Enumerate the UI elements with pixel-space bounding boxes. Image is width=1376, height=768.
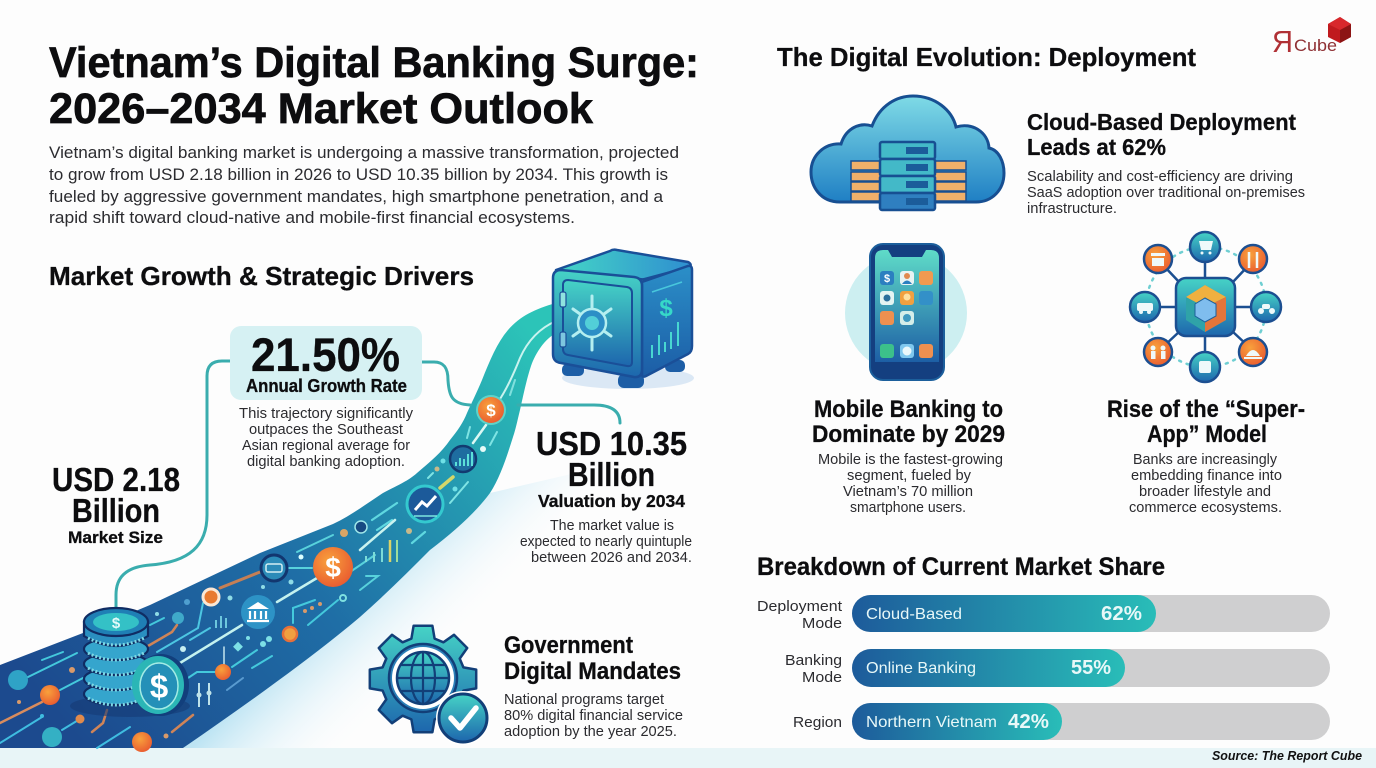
super app text: Rise of the “Super-	[1107, 396, 1305, 423]
stat: valuation: The market value is	[550, 518, 674, 534]
intro paragraph: to grow from USD 2.18 billion in 2026 to USD 10.35 billion by 2034. This growth is	[49, 165, 668, 184]
icon: cloud servers	[811, 96, 1004, 210]
mobile text: Vietnam’s 70 million	[843, 484, 973, 500]
road nodes: $	[486, 401, 496, 420]
bar chart	[757, 595, 1330, 740]
heading: market growth: Market Growth & Strategic Drivers	[49, 261, 474, 291]
super app text: broader lifestyle and	[1139, 484, 1271, 500]
bar: deployment mode: Cloud-Based	[866, 606, 962, 623]
growth rate callout	[230, 326, 422, 400]
icon: government gear	[370, 626, 490, 745]
bar: region: 42%	[1008, 711, 1049, 733]
stat: market size	[52, 461, 180, 547]
stat: market size: Billion	[72, 492, 160, 529]
icon: coin stack	[70, 608, 190, 717]
stat: market size: Market Size	[68, 528, 163, 547]
government mandates text: adoption by the year 2025.	[504, 723, 677, 740]
intro paragraph	[49, 143, 679, 227]
growth rate description	[239, 406, 414, 470]
cloud text: infrastructure.	[1027, 201, 1117, 217]
bar: region	[793, 703, 1330, 740]
stat: market size: USD 2.18	[52, 461, 180, 498]
growth rate description: digital banking adoption.	[247, 454, 405, 470]
growth rate description: Asian regional average for	[242, 438, 410, 454]
logo: Я	[1272, 24, 1293, 59]
mobile text	[812, 396, 1005, 516]
bar: banking mode: Online Banking	[866, 660, 976, 677]
coin: $	[150, 668, 168, 705]
road nodes	[8, 395, 506, 752]
bar: banking mode: Banking	[785, 652, 842, 669]
road nodes: $	[325, 552, 341, 583]
mobile text: Mobile is the fastest-growing	[818, 452, 1003, 468]
growth road	[0, 303, 610, 752]
government mandates text: Government	[504, 632, 633, 659]
title	[49, 39, 699, 133]
icon: safe	[553, 250, 694, 389]
icon: super app network	[1130, 232, 1281, 382]
stat: valuation: expected to nearly quintuple	[520, 534, 692, 550]
logo	[1272, 17, 1351, 59]
growth rate description: This trajectory significantly	[239, 406, 414, 422]
title: Vietnam’s Digital Banking Surge:	[49, 39, 699, 87]
heading: market share: Breakdown of Current Market Share	[757, 553, 1165, 581]
government mandates text	[504, 632, 683, 740]
road circuit lines	[0, 321, 556, 748]
bar: deployment mode: Mode	[802, 615, 842, 632]
heading: digital evolution: The Digital Evolution: Deployment	[777, 42, 1196, 72]
mobile text: Dominate by 2029	[812, 421, 1005, 448]
intro paragraph: rapid shift toward cloud-native and mobile-first financial ecosystems.	[49, 208, 575, 227]
government mandates text: 80% digital financial service	[504, 707, 683, 724]
government mandates text: National programs target	[504, 691, 665, 708]
growth rate callout: 21.50%	[251, 328, 400, 381]
icon: phone: $	[884, 273, 890, 285]
intro paragraph: Vietnam’s digital banking market is undergoing a massive transformation, projected	[49, 143, 679, 162]
cloud text: Cloud-Based Deployment	[1027, 109, 1296, 135]
bar: deployment mode	[757, 595, 1330, 632]
title: 2026–2034 Market Outlook	[49, 85, 593, 133]
stat: valuation	[520, 425, 692, 566]
stat: valuation: between 2026 and 2034.	[531, 550, 692, 566]
bar: banking mode: 55%	[1071, 657, 1111, 679]
super app text: Banks are increasingly	[1133, 452, 1278, 468]
government mandates text: Digital Mandates	[504, 658, 681, 685]
footer band	[0, 748, 1376, 768]
super app text: commerce ecosystems.	[1129, 500, 1282, 516]
icon: coin stack: $	[112, 615, 121, 632]
bar: banking mode	[785, 649, 1330, 687]
stat: valuation: USD 10.35	[536, 425, 687, 462]
bar: banking mode: Mode	[802, 669, 842, 686]
stat: valuation: Billion	[568, 456, 655, 493]
super app text: embedding finance into	[1131, 468, 1282, 484]
cloud text	[1027, 109, 1305, 217]
growth rate description: outpaces the Southeast	[249, 422, 403, 438]
mobile text: smartphone users.	[850, 500, 966, 516]
icon: phone	[845, 244, 967, 380]
bar: deployment mode: 62%	[1101, 603, 1142, 625]
cloud text: Leads at 62%	[1027, 134, 1166, 160]
stat: valuation: Valuation by 2034	[538, 491, 685, 511]
bar: deployment mode: Deployment	[757, 598, 843, 615]
super app text: App” Model	[1147, 421, 1267, 448]
source note: Source: The Report Cube	[1212, 749, 1362, 763]
connector lines	[116, 361, 620, 607]
icon: safe: $	[659, 295, 673, 322]
cloud text: Scalability and cost-efficiency are driving	[1027, 169, 1293, 185]
bar: region: Northern Vietnam	[866, 714, 997, 731]
bar: region: Region	[793, 714, 842, 731]
cloud text: SaaS adoption over traditional on-premises	[1027, 185, 1305, 201]
logo: Cube	[1294, 36, 1337, 55]
mobile text: segment, fueled by	[847, 468, 972, 484]
intro paragraph: fueled by aggressive government mandates, high smartphone penetration, and a	[49, 187, 664, 206]
super app text	[1107, 396, 1305, 516]
mobile text: Mobile Banking to	[814, 396, 1003, 423]
growth rate callout: Annual Growth Rate	[246, 376, 407, 396]
